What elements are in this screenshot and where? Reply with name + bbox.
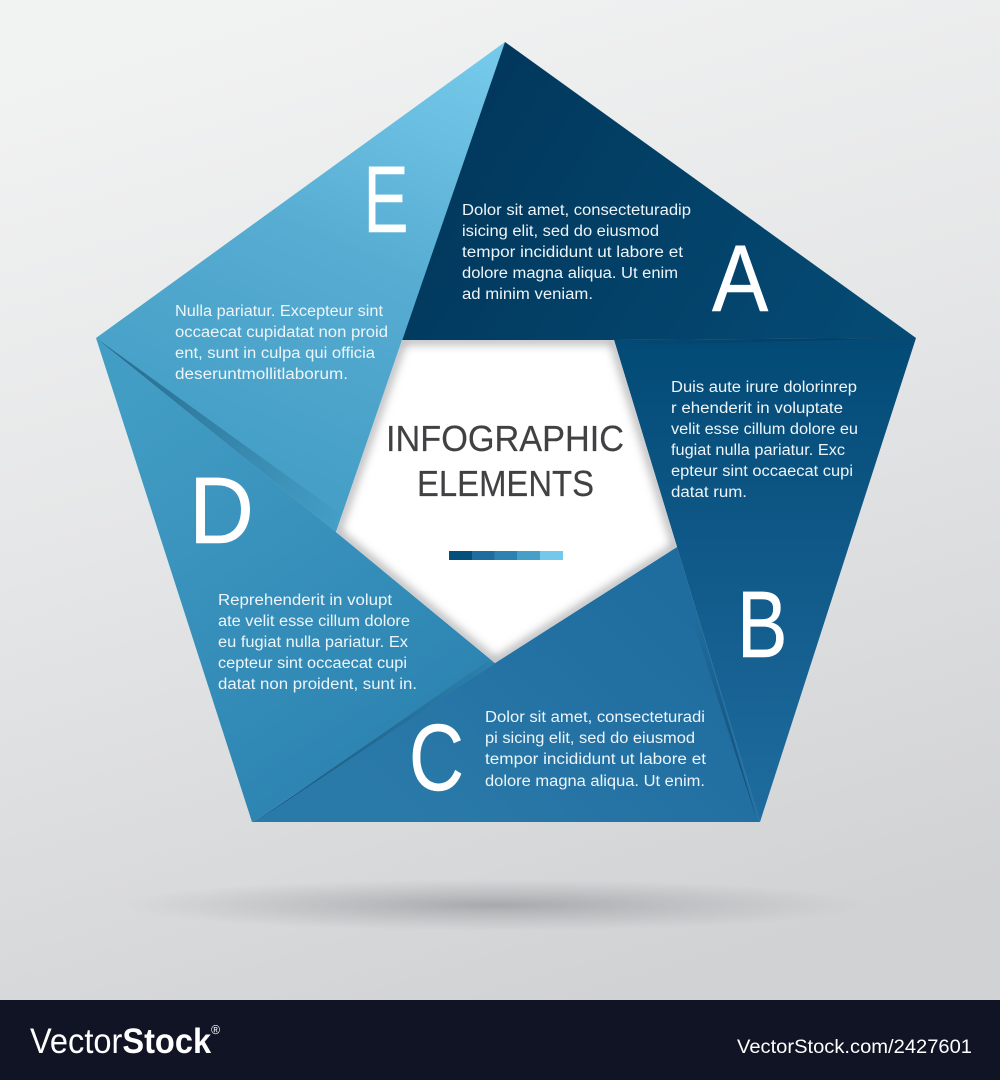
text block D: [218, 592, 417, 693]
floor shadow: [120, 879, 870, 931]
text block D: Reprehenderit in volupt: [218, 592, 393, 609]
text block B: datat rum.: [671, 484, 747, 501]
text block C: pi sicing elit, sed do eiusmod: [485, 730, 695, 747]
panel: E: [96, 42, 505, 532]
heading: ELEMENTS: [417, 463, 594, 504]
fold shadow A-B: [614, 338, 916, 345]
letter A: A: [712, 226, 769, 332]
text block A: Dolor sit amet, consecteturadip: [462, 202, 691, 219]
text block C: Dolor sit amet, consecteturadi: [485, 709, 705, 726]
heading: [386, 418, 624, 504]
letter E: E: [364, 147, 408, 253]
footer logo: ®: [211, 1022, 220, 1037]
text block A: tempor incididunt ut labore et: [462, 244, 684, 261]
footer logo: VectorStock: [30, 1022, 218, 1061]
panel: D: [96, 338, 495, 822]
panel: A: [402, 42, 916, 345]
text block B: fugiat nulla pariatur. Exc: [671, 442, 845, 459]
text block A: dolore magna aliqua. Ut enim: [462, 265, 678, 282]
fold shadow D-E: [96, 338, 340, 532]
text block E: [175, 303, 388, 383]
text block B: Duis aute irure dolorinrep: [671, 379, 857, 396]
text block E: ent, sunt in culpa qui officia: [175, 345, 375, 362]
text block E: Nulla pariatur. Excepteur sint: [175, 303, 384, 320]
text block C: dolore magna aliqua. Ut enim.: [485, 773, 705, 790]
letter C: C: [409, 705, 464, 811]
text block A: ad minim veniam.: [462, 286, 593, 303]
text block E: deseruntmollitlaborum.: [175, 366, 348, 383]
text block D: ate velit esse cillum dolore: [218, 613, 410, 630]
text block D: datat non proident, sunt in.: [218, 676, 417, 693]
letter D: D: [189, 458, 254, 564]
text block D: cepteur sint occaecat cupi: [218, 655, 407, 672]
text block B: epteur sint occaecat cupi: [671, 463, 853, 480]
text block E: occaecat cupidatat non proid: [175, 324, 388, 341]
text block A: [462, 202, 691, 303]
text block D: eu fugiat nulla pariatur. Ex: [218, 634, 408, 651]
pentagon diagram: [96, 42, 916, 822]
colour bar: [449, 551, 563, 560]
text block B: velit esse cillum dolore eu: [671, 421, 858, 438]
letter B: B: [737, 572, 788, 678]
text block A: isicing elit, sed do eiusmod: [462, 223, 659, 240]
panel: B: [614, 338, 916, 822]
text block B: r ehenderit in voluptate: [671, 400, 843, 417]
text block B: [671, 379, 858, 501]
panel: C: [252, 547, 760, 822]
fold shadow B-C: [670, 547, 757, 820]
footer bar: [0, 1000, 1000, 1080]
center panel: [336, 340, 677, 663]
heading: INFOGRAPHIC: [386, 418, 624, 459]
text block C: [485, 709, 707, 790]
footer url: VectorStock.com/2427601: [737, 1036, 972, 1058]
fold shadow C-D: [258, 662, 495, 820]
text block C: tempor incididunt ut labore et: [485, 751, 707, 768]
